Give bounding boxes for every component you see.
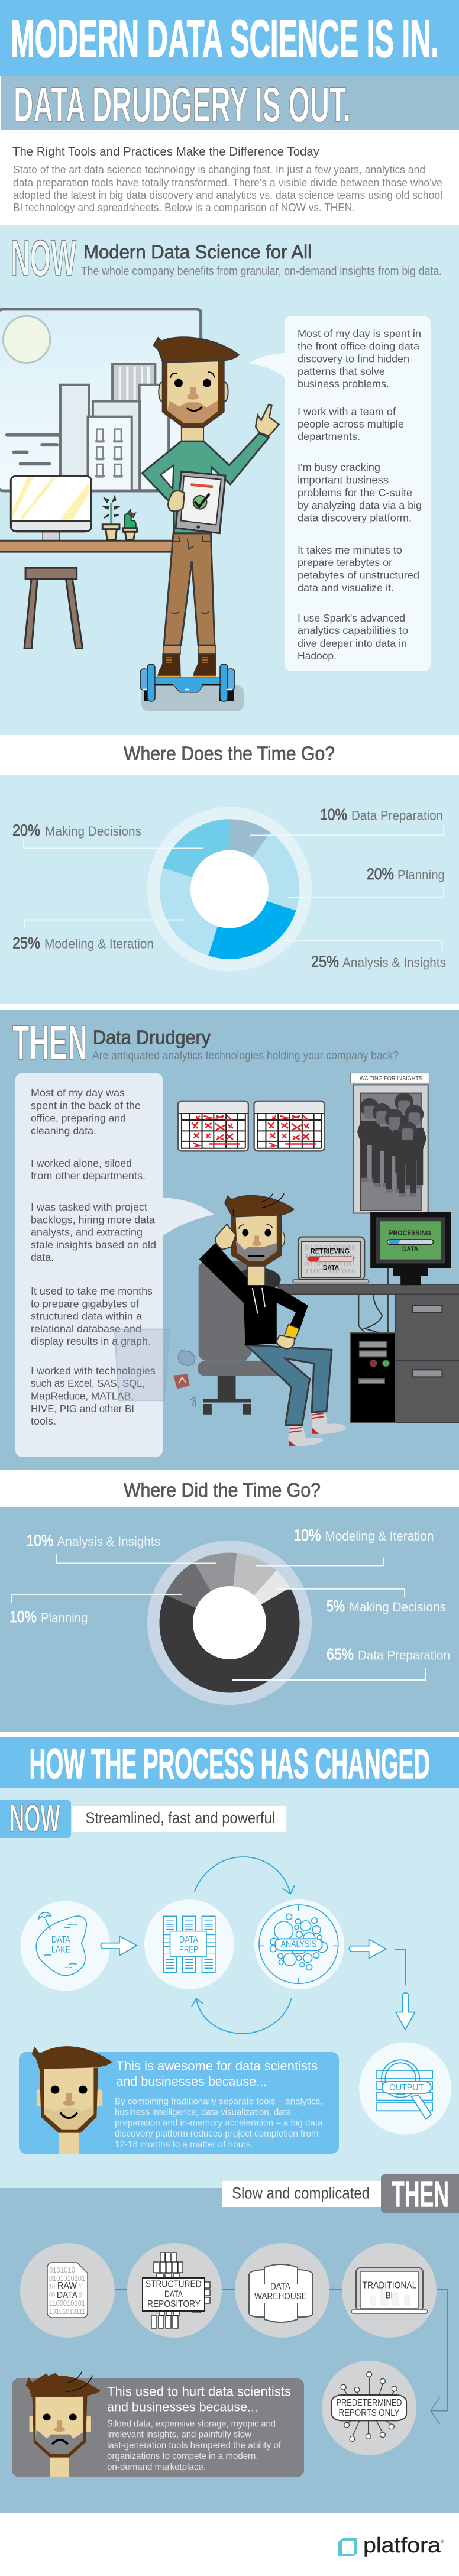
bubble text: I use Spark's advanced	[298, 612, 405, 624]
label: data preparation: Data Preparation	[358, 1648, 450, 1663]
bubble text: analysts, and extracting	[31, 1226, 143, 1238]
then section subtitle: Are antiquated analytics technologies holding your company back?	[92, 1049, 399, 1062]
binary screen text: 10101010101	[305, 1253, 356, 1260]
callout body	[107, 2419, 282, 2473]
desk top	[0, 541, 173, 552]
retrieving data text: DATA	[323, 1264, 339, 1271]
label: making decisions: Making Decisions	[349, 1600, 446, 1614]
callout: awesome	[19, 2046, 339, 2154]
node: raw data: RAW	[57, 2281, 77, 2291]
arrow: analysis to prep loop	[192, 1998, 292, 2034]
icon: monitor stand	[393, 1268, 428, 1285]
now tab	[0, 1797, 71, 1840]
label: modeling and iteration: Modeling & Iteration	[325, 1529, 434, 1543]
label: analysis and insights: Analysis & Insights	[342, 955, 446, 970]
panel: title band	[0, 0, 459, 76]
icon: plant	[102, 496, 119, 540]
panel: process heading band	[0, 1737, 459, 1788]
label: modeling and iteration	[12, 934, 154, 952]
heading: where does the time go: Where Does the Time Go?	[124, 743, 335, 764]
callout body	[115, 2096, 323, 2150]
node: structured data repository: STRUCTURED	[146, 2280, 201, 2290]
bubble text: display results in a graph.	[31, 1335, 151, 1347]
icon: calendars	[178, 1101, 324, 1151]
label: modeling and iteration: 10%	[293, 1526, 321, 1544]
bubble text: patterns that solve	[298, 365, 385, 377]
hoodie hood	[234, 1268, 281, 1292]
neck	[182, 427, 203, 441]
logo: platfora	[338, 2533, 444, 2557]
bubble text: data discovery platform.	[298, 512, 412, 524]
panel: now section	[0, 225, 459, 735]
processing data text: PROCESSING	[389, 1230, 431, 1237]
illustration: chair	[198, 1261, 281, 1415]
then heading: THEN	[12, 1015, 88, 1070]
callout heading: This is awesome for data scientists	[116, 2059, 318, 2073]
label: making decisions: 5%	[327, 1597, 345, 1615]
hoodie	[199, 1243, 308, 1345]
icon: laptop	[293, 1237, 369, 1283]
bubble text: It used to take me months	[31, 1285, 153, 1297]
node: data lake: LAKE	[51, 1945, 70, 1955]
bubble text: people across multiple	[298, 418, 404, 430]
bubble text: spent in the back of the	[31, 1099, 141, 1111]
bubble text: Most of my day was	[31, 1087, 125, 1099]
node: raw data: 11	[79, 2283, 85, 2291]
pointing hand	[256, 404, 279, 436]
then tagline	[222, 2181, 382, 2207]
label: analysis and insights: 10%	[26, 1532, 53, 1549]
intro paragraph	[13, 164, 442, 213]
bubble text	[298, 328, 422, 662]
bubble text: such as Excel, SAS, SQL,	[31, 1377, 145, 1389]
label: planning	[9, 1608, 88, 1626]
intro paragraph: data preparation tools have totally transformed. There's a visible divide between those who've	[13, 177, 442, 189]
hair	[154, 337, 238, 362]
panel: subtitle band	[1, 76, 459, 132]
callout body: Siloed data, expensive storage, myopic and	[107, 2419, 276, 2429]
label: modeling and iteration: Modeling & Iteration	[44, 937, 154, 951]
panel: now donut chart section	[0, 775, 459, 1004]
bubble text: important business	[298, 474, 389, 486]
node: traditional bi	[342, 2243, 437, 2338]
panel: process now	[0, 1788, 459, 2188]
binary screen text	[305, 1244, 356, 1275]
arrow: analysis to output	[349, 1939, 415, 2030]
bubble text: data and visualize it.	[298, 582, 394, 594]
bubble text: I was tasked with project	[31, 1201, 147, 1213]
icon: sad face	[26, 2371, 101, 2477]
callout body: 12-18 months to a matter of hours.	[115, 2140, 253, 2150]
then section title: Data Drudgery	[93, 1027, 211, 1048]
tablet hand	[168, 491, 185, 511]
callout body: preparation and in-memory acceleration – a big data	[115, 2118, 323, 2128]
icon: monitor	[11, 476, 91, 541]
label: analysis and insights	[26, 1532, 160, 1549]
bubble text: analytics capabilities to	[298, 624, 408, 636]
bubble text: cleaning data.	[31, 1125, 96, 1137]
label: planning: 10%	[9, 1608, 37, 1626]
node: output	[359, 2043, 451, 2135]
bubble text: office, preparing and	[31, 1112, 126, 1124]
bubble text: business problems.	[298, 378, 389, 390]
intro paragraph: State of the art data science technology is changing fast. In just a few years, analytics and	[13, 164, 425, 176]
callout body: discovery platform reduces project completion from	[115, 2129, 318, 2139]
bubble text: MapReduce, MATLAB,	[31, 1390, 134, 1402]
icon: stool	[24, 568, 83, 648]
leader lines	[11, 1554, 426, 1680]
node: raw data: DATA	[57, 2290, 77, 2300]
logo: platfora: ®	[441, 2539, 444, 2544]
intro paragraph: BI technology and spreadsheets. Below is a comparison of NOW vs. THEN.	[13, 202, 355, 213]
node: analysis	[254, 1899, 344, 1989]
donut chart: then	[147, 1541, 312, 1705]
sign: waiting for insights	[350, 1073, 429, 1083]
face	[235, 1215, 277, 1261]
bubble text: relational database and	[31, 1323, 141, 1335]
bubble text: It takes me minutes to	[298, 544, 402, 556]
node: data lake	[20, 1901, 110, 1991]
bubble text: I'm busy cracking	[298, 461, 380, 473]
intro heading: The Right Tools and Practices Make the Difference Today	[12, 145, 320, 158]
label: making decisions	[327, 1597, 446, 1615]
sweater	[142, 433, 269, 533]
bubble text: stale insights based on old	[31, 1239, 156, 1251]
label: making decisions: 20%	[12, 821, 40, 839]
now section title: Modern Data Science for All	[83, 241, 312, 263]
bubble text: I worked with technologies	[31, 1365, 156, 1377]
bubble text: prepare terabytes or	[298, 556, 392, 568]
callout: awesome: and businesses because...	[116, 2074, 267, 2089]
label: analysis and insights: Analysis & Insights	[57, 1534, 160, 1549]
node: raw data: 1100010101	[49, 2299, 85, 2308]
face	[167, 361, 218, 423]
node: predetermined reports: PREDETERMINED	[336, 2398, 402, 2408]
panel: then donut chart section	[0, 1507, 459, 1732]
label: making decisions: Making Decisions	[45, 824, 141, 839]
callout body: organizations to compete in a modern,	[107, 2451, 258, 2461]
bubble text: from other departments.	[31, 1170, 146, 1182]
label: analysis and insights: 25%	[311, 953, 339, 970]
socks	[312, 1412, 347, 1435]
connector and arrow	[115, 2290, 447, 2424]
beard	[232, 1215, 281, 1266]
panel: process then	[0, 2174, 459, 2513]
bubble text: departments.	[298, 431, 360, 442]
bubble text: data.	[31, 1251, 54, 1263]
node: analysis: ANALYSIS	[280, 1940, 317, 1949]
node: data warehouse	[235, 2243, 329, 2338]
node: predetermined reports	[322, 2361, 416, 2455]
callout body: business intelligence, data visualization, data	[115, 2108, 291, 2117]
callout body: irrelevant insights, and painfully slow	[107, 2430, 251, 2440]
callout body: on-demand marketplace.	[107, 2462, 206, 2473]
tablet	[176, 471, 225, 533]
icon: waste bin with paper	[115, 1329, 196, 1407]
now heading: NOW	[11, 230, 76, 287]
raised hand	[215, 1224, 235, 1250]
label: making decisions	[12, 821, 141, 839]
bubble text	[31, 1087, 156, 1427]
speech bubble: then	[15, 1073, 214, 1457]
jeans	[246, 1345, 332, 1425]
bubble text: I work with a team of	[298, 406, 396, 418]
leader lines	[24, 824, 444, 950]
label: planning: 20%	[367, 865, 394, 883]
callout: hurt	[12, 2371, 304, 2477]
ears	[159, 382, 165, 402]
intro text block	[12, 145, 442, 213]
bubble text: Hadoop.	[298, 650, 337, 662]
node: raw data: 01	[79, 2291, 85, 2299]
label: planning	[367, 865, 445, 883]
label: data preparation: Data Preparation	[351, 808, 443, 823]
label: data preparation: 10%	[320, 805, 347, 823]
node: structured data repository: DATA	[164, 2289, 183, 2299]
heading: where did the time go: Where Did the Time Go?	[124, 1479, 321, 1501]
trousers	[164, 533, 215, 645]
node: raw data: 0101010	[49, 2266, 75, 2274]
node: raw data: 0101010101	[49, 2274, 85, 2283]
node: raw data	[20, 2243, 115, 2338]
callout: hurt: and businesses because...	[107, 2400, 258, 2415]
wrist watch	[284, 1325, 299, 1339]
bubble text: HIVE, PIG and other BI	[31, 1403, 134, 1415]
callout heading: This used to hurt data scientists	[107, 2384, 291, 2399]
icon: cactus	[123, 510, 137, 540]
now tagline: Streamlined, fast and powerful	[85, 1809, 275, 1827]
sign: waiting for insights: WAITING FOR INSIGHTS	[360, 1075, 422, 1082]
illustration: city window	[0, 309, 201, 491]
node: data warehouse: WAREHOUSE	[254, 2292, 307, 2302]
beard	[163, 361, 224, 427]
node: structured data repository: REPOSITORY	[147, 2299, 201, 2309]
label: planning: Planning	[41, 1610, 88, 1625]
ear	[279, 1232, 285, 1246]
callout body: last-generation tools hampered the ability of	[107, 2441, 282, 2451]
binary screen text: 11000101010	[305, 1268, 356, 1275]
intro paragraph: adopted the latest in big data discovery and analytics vs. data science teams using old school	[13, 189, 442, 201]
node: raw data: 10101010111	[49, 2308, 85, 2316]
label: planning: Planning	[397, 868, 445, 882]
processing data text: DATA	[402, 1246, 418, 1253]
bubble text: structured data within a	[31, 1310, 142, 1322]
logo: platfora: platfora	[363, 2533, 441, 2557]
now tagline	[72, 1806, 286, 1832]
node: data prep	[144, 1899, 234, 1989]
binary screen text: 01001010101	[305, 1261, 356, 1268]
wrist hand	[277, 1335, 295, 1349]
icon: computer tower	[351, 1333, 395, 1422]
retrieving data text	[308, 1248, 354, 1271]
icon: happy face	[31, 2046, 112, 2154]
label: modeling and iteration: 25%	[12, 934, 40, 952]
node: output: OUTPUT	[389, 2083, 424, 2093]
node: data prep: PREP	[179, 1945, 198, 1955]
neck	[247, 1266, 265, 1286]
arrow: lake to prep	[101, 1936, 137, 1956]
illustration: data scientist then	[199, 1193, 347, 1446]
node: structured data repository	[127, 2243, 222, 2338]
illustration: boots	[158, 645, 216, 677]
callout body: By combining traditionally separate tools – analytics,	[115, 2096, 323, 2106]
bubble text: tools.	[31, 1415, 56, 1427]
speech bubble: now	[248, 316, 431, 671]
bubble text: backlogs, hiring more data	[31, 1213, 155, 1225]
then tagline: Slow and complicated	[232, 2185, 370, 2202]
bubble text: discovery to find hidden	[298, 353, 409, 365]
illustration: data scientist now	[142, 337, 279, 645]
bubble text: I worked alone, siloed	[31, 1157, 132, 1169]
bubble text: to prepare gigabytes of	[31, 1297, 139, 1309]
node: data warehouse: DATA	[270, 2282, 290, 2292]
bubble text: dive deeper into data in	[298, 637, 407, 649]
bubble text: problems for the C-suite	[298, 487, 412, 499]
node: traditional bi: TRADITIONAL	[362, 2280, 417, 2290]
panel: then section	[0, 1010, 459, 1470]
node: raw data: 10	[49, 2283, 55, 2291]
bubble text: by analyzing data via a big	[298, 499, 422, 511]
binary screen text: 01010101010	[305, 1244, 356, 1251]
now tab: NOW	[9, 1797, 60, 1840]
bubble text: petabytes of unstructured	[298, 569, 419, 581]
illustration: hoverboard	[140, 664, 244, 711]
label: analysis and insights	[311, 953, 446, 970]
donut chart: now	[147, 807, 312, 971]
node: raw data: 00	[49, 2291, 55, 2299]
node: predetermined reports: REPORTS ONLY	[338, 2408, 400, 2418]
node: data prep: DATA	[179, 1935, 198, 1945]
bubble text: Most of my day is spent in	[298, 328, 421, 339]
node: traditional bi: BI	[386, 2291, 393, 2301]
node: data lake: DATA	[51, 1935, 70, 1945]
label: data preparation	[327, 1646, 450, 1664]
illustration: desk, monitor and stool	[0, 476, 173, 648]
arrow: prep to analysis loop	[195, 1857, 295, 1894]
label: modeling and iteration	[293, 1526, 434, 1544]
icon: waiting for insights door	[350, 1073, 429, 1213]
bubble text: the front office doing data	[298, 340, 419, 352]
retrieving data text: RETRIEVING	[311, 1248, 350, 1255]
label: data preparation	[320, 805, 443, 823]
processing data text	[389, 1230, 431, 1253]
label: data preparation: 65%	[327, 1646, 354, 1664]
illustration: workstation	[278, 1212, 459, 1422]
hair	[225, 1196, 293, 1216]
